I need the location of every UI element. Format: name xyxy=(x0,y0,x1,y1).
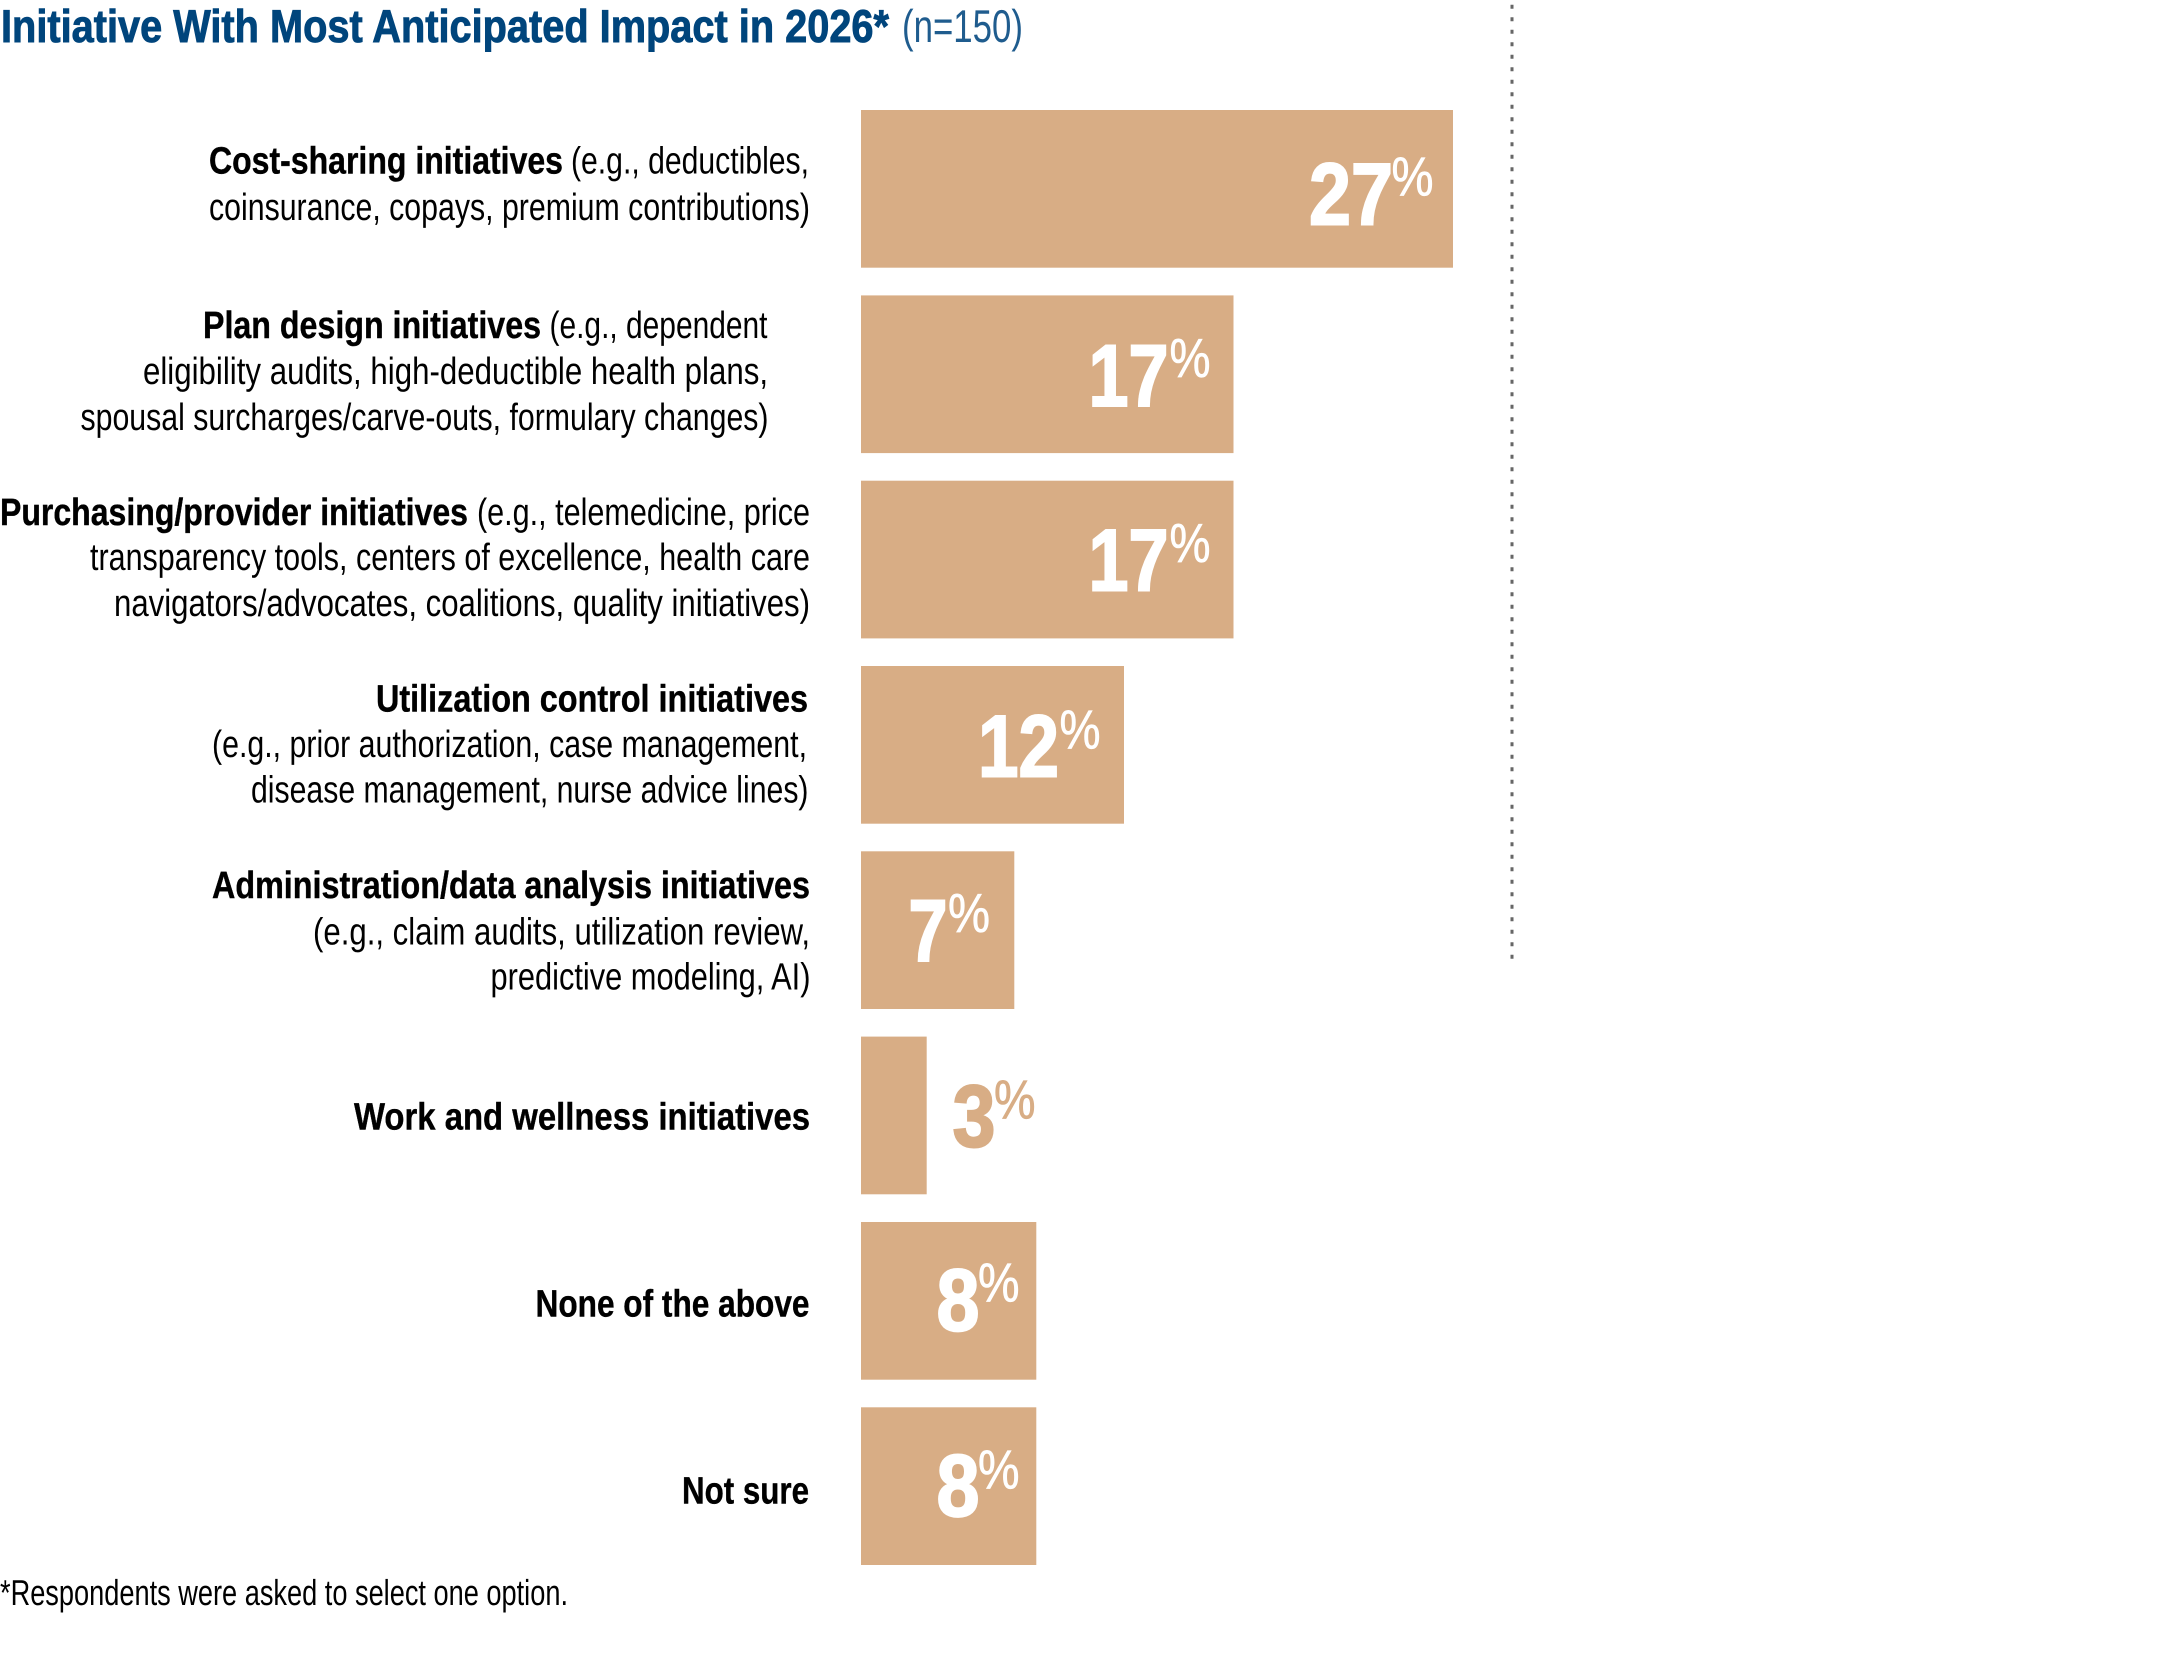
value: 3%: % xyxy=(994,1068,1036,1130)
value: 7%: 7 xyxy=(908,881,948,980)
bar: 12% xyxy=(861,666,1124,824)
value: 8%: 8 xyxy=(936,1250,980,1350)
label: cost-sharing initiatives: (e.g., deductibles, xyxy=(571,140,809,182)
value: 17%: 17 xyxy=(1088,510,1168,610)
label: purchasing/provider initiatives: navigators/advocates, coalitions, quality initiatives) xyxy=(114,583,810,625)
value: 7%: % xyxy=(948,882,990,944)
value: 7% xyxy=(908,881,990,980)
row: not sure xyxy=(682,1407,1036,1565)
label: work and wellness initiatives: Work and wellness initiatives xyxy=(354,1096,810,1138)
label: utilization control initiatives: (e.g., prior authorization, case management, xyxy=(212,724,807,766)
value: 3% xyxy=(952,1066,1036,1166)
label: purchasing/provider initiatives: transparency tools, centers of excellence, health care xyxy=(90,537,810,579)
row: work and wellness initiatives xyxy=(354,1037,1036,1194)
value: 3%: 3 xyxy=(952,1066,996,1166)
label: plan design initiatives: (e.g., dependent xyxy=(550,305,768,347)
label: utilization control initiatives xyxy=(212,678,808,812)
label: not sure: Not sure xyxy=(682,1470,809,1512)
value: 12%: 12 xyxy=(978,696,1059,796)
title: Initiative With Most Anticipated Impact in 2026* xyxy=(1,0,889,52)
value: 17%: % xyxy=(1170,512,1210,574)
label: none of the above: None of the above xyxy=(536,1284,810,1326)
bar: 17% xyxy=(861,481,1234,638)
row: none of the above xyxy=(536,1222,1036,1380)
bar: 3% xyxy=(861,1037,927,1194)
label: purchasing/provider initiatives xyxy=(0,492,810,625)
value: 27%: % xyxy=(1392,146,1434,208)
row: purchasing/provider initiatives xyxy=(0,481,1234,638)
label: purchasing/provider initiatives: Purchasing/provider initiatives xyxy=(0,492,468,534)
label: administration/data analysis initiatives: predictive modeling, AI) xyxy=(490,957,810,999)
value: 8%: 8 xyxy=(936,1436,980,1535)
row: administration/data analysis initiatives xyxy=(212,851,1014,1009)
label: plan design initiatives: spousal surcharges/carve-outs, formulary changes) xyxy=(80,397,768,439)
row: cost-sharing initiatives xyxy=(209,110,1453,268)
value: 8%: % xyxy=(978,1252,1020,1314)
bar: 8% xyxy=(861,1222,1036,1380)
label: administration/data analysis initiatives xyxy=(212,865,810,999)
label: administration/data analysis initiatives: (e.g., claim audits, utilization review, xyxy=(313,911,810,953)
row: utilization control initiatives xyxy=(212,666,1124,824)
value: 12%: % xyxy=(1060,698,1100,760)
value: 8% xyxy=(936,1436,1020,1535)
label: plan design initiatives xyxy=(80,305,768,439)
label: plan design initiatives: eligibility audits, high-deductible health plans, xyxy=(143,351,768,393)
value: 17%: % xyxy=(1170,327,1210,389)
footnote: *Respondents were asked to select one option. xyxy=(0,1572,568,1613)
label: administration/data analysis initiatives: Administration/data analysis initiatives xyxy=(212,865,810,907)
value: 17%: 17 xyxy=(1088,326,1168,425)
label: utilization control initiatives: Utilization control initiatives xyxy=(376,679,808,721)
bar: 17% xyxy=(861,295,1234,453)
label: utilization control initiatives: disease management, nurse advice lines) xyxy=(251,770,808,812)
label: plan design initiatives: Plan design initiatives xyxy=(203,305,541,347)
value: 8% xyxy=(936,1250,1020,1350)
bar: 8% xyxy=(861,1407,1036,1565)
label: cost-sharing initiatives: Cost-sharing initiatives xyxy=(209,140,563,182)
bar: 27% xyxy=(861,110,1453,268)
row: plan design initiatives xyxy=(80,295,1234,453)
value: 8%: % xyxy=(978,1438,1020,1500)
label: purchasing/provider initiatives: (e.g., telemedicine, price xyxy=(477,492,810,534)
bar: 7% xyxy=(861,851,1014,1009)
label: cost-sharing initiatives xyxy=(209,140,810,229)
title: (n=150) xyxy=(902,0,1023,52)
value: 27%: 27 xyxy=(1309,144,1393,244)
label: cost-sharing initiatives: coinsurance, copays, premium contributions) xyxy=(209,187,810,229)
